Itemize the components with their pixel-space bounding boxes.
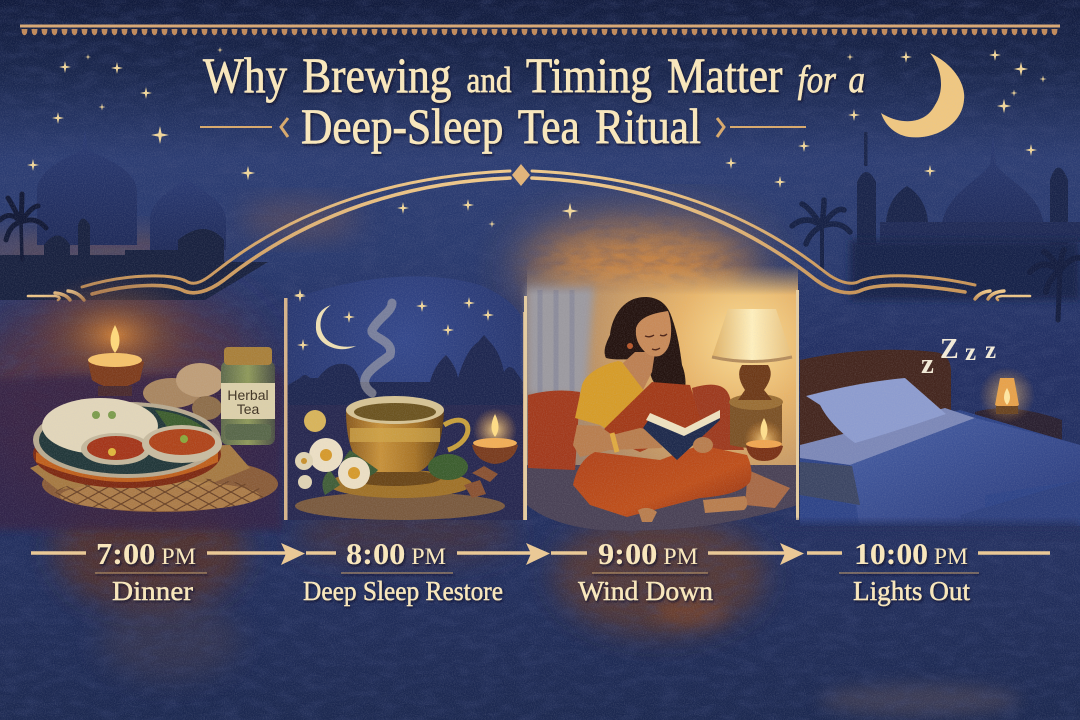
title bbox=[203, 47, 865, 154]
bed sheets and blanket bbox=[800, 408, 1080, 530]
arch centre diamond bbox=[512, 164, 530, 186]
step: 8:00 PM deep sleep restore: Deep Sleep Restore bbox=[303, 576, 503, 606]
step: 10:00 PM lights out: 10:00 PM bbox=[854, 536, 968, 571]
blouse bbox=[575, 361, 645, 430]
step: 8:00 PM deep sleep restore bbox=[303, 536, 503, 606]
icon: thali plate bbox=[33, 398, 222, 488]
sleep letters: z bbox=[985, 337, 996, 364]
icon: daisies and leaves bbox=[295, 410, 468, 495]
bedroom headboard bbox=[800, 350, 951, 445]
icon: open book bbox=[643, 410, 720, 460]
icon: lantern on side table bbox=[975, 367, 1062, 445]
panel side rules bbox=[284, 298, 526, 520]
panel side rules bbox=[524, 290, 799, 520]
step: 9:00 PM wind down: Wind Down bbox=[578, 576, 714, 606]
sleep letters: Z bbox=[940, 334, 959, 365]
title: Why Brewing and Timing Matter for a bbox=[203, 47, 865, 103]
sleep letters: z bbox=[965, 339, 976, 366]
panel: wind down bbox=[524, 262, 799, 531]
soft fade under panels bbox=[780, 522, 1080, 536]
icon: pillow bbox=[806, 378, 946, 443]
arm bbox=[573, 425, 662, 457]
icon: far-right palm bbox=[1030, 250, 1080, 320]
face bbox=[636, 311, 671, 356]
candle glow and table bbox=[0, 273, 282, 530]
top decorative border bbox=[20, 24, 1060, 38]
night window scene bbox=[288, 262, 524, 520]
panel: tea bbox=[284, 262, 526, 520]
illustration: woman reading bbox=[573, 297, 751, 522]
step: 7:00 PM dinner bbox=[95, 536, 207, 606]
earring bbox=[627, 343, 633, 349]
icon: table lamp and side table bbox=[712, 309, 792, 448]
icon: left palm bbox=[0, 194, 46, 260]
panel: dinner bbox=[0, 273, 282, 530]
sleep letters bbox=[921, 334, 996, 380]
floor cushion bbox=[745, 470, 790, 508]
skirt bbox=[573, 445, 751, 517]
rug bbox=[527, 465, 798, 531]
icon: reading diya bbox=[744, 418, 784, 461]
hair bbox=[605, 297, 686, 400]
icon: herbal tea jar: Tea bbox=[237, 401, 259, 417]
icon: naan bread bbox=[143, 363, 224, 420]
step: 10:00 PM lights out bbox=[839, 536, 979, 606]
icon: small moon and stars bbox=[294, 290, 494, 351]
step: 9:00 PM wind down: 9:00 PM bbox=[598, 536, 698, 571]
step: 7:00 PM dinner: Dinner bbox=[112, 576, 193, 606]
sari drape bbox=[600, 382, 702, 452]
red cushions bbox=[528, 391, 580, 470]
neck bbox=[622, 352, 655, 392]
crescent moon bbox=[881, 53, 964, 137]
title flourishes bbox=[200, 118, 806, 137]
warm horizon and lower glow patches bbox=[0, 202, 1020, 716]
icon: golden teacup bbox=[328, 396, 472, 498]
step: 9:00 PM wind down bbox=[578, 536, 714, 606]
sleep letters: z bbox=[921, 348, 934, 380]
skyline right bbox=[792, 132, 1080, 320]
timeline arrows bbox=[31, 551, 1050, 555]
step: 7:00 PM dinner: 7:00 PM bbox=[96, 536, 196, 571]
title: Deep-Sleep Tea Ritual bbox=[301, 98, 701, 154]
step: 10:00 PM lights out: Lights Out bbox=[853, 576, 970, 606]
icon: woven placemat bbox=[30, 445, 278, 512]
icon: steam bbox=[365, 303, 392, 393]
skyline left bbox=[0, 130, 268, 300]
timeline arrowheads bbox=[281, 543, 804, 565]
icon: diya candle bbox=[88, 325, 144, 396]
warm room bbox=[527, 262, 798, 531]
step: 8:00 PM deep sleep restore: 8:00 PM bbox=[346, 536, 446, 571]
facial features bbox=[645, 334, 667, 350]
icon: herbal tea jar bbox=[221, 347, 275, 445]
icon: right palm bbox=[792, 200, 850, 270]
icon: tea diya and sugar bbox=[464, 408, 518, 498]
stars bbox=[27, 47, 1047, 301]
timeline bbox=[31, 536, 1050, 606]
ornate arch frame bbox=[28, 171, 1030, 300]
bangles bbox=[612, 433, 617, 452]
feet bbox=[703, 496, 747, 513]
panel: lights out bbox=[800, 334, 1080, 530]
icon: herbal tea jar: Herbal bbox=[227, 387, 269, 403]
